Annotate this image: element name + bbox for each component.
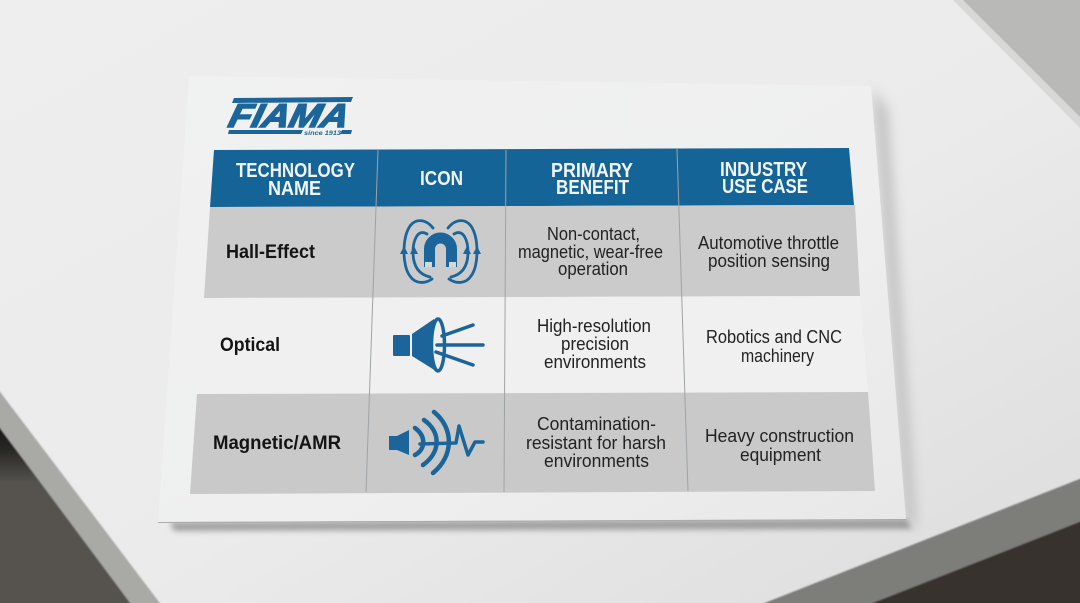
icon: light source with beams [393, 318, 483, 372]
benefit: environments [544, 450, 649, 471]
logo: FIAMA: FIAMA [225, 98, 353, 135]
desk corner, lower left [0, 364, 181, 603]
desk corner, lower right [696, 467, 1080, 603]
icon: horseshoe magnet with field lines [400, 221, 481, 282]
icon: speaker with waves and pulse [389, 412, 483, 473]
benefit: Non-contact, [547, 223, 640, 244]
benefit: operation [558, 258, 628, 279]
paper sheet [158, 76, 906, 522]
row: Hall-Effect [204, 205, 860, 298]
benefit: resistant for harsh [526, 432, 666, 453]
header: primary benefit [551, 160, 634, 199]
background wall, upper right [953, 0, 1080, 128]
header row [210, 148, 854, 207]
benefit: precision [561, 333, 629, 354]
header: primary benefit: BENEFIT [556, 177, 629, 199]
header: primary benefit: PRIMARY [551, 160, 634, 182]
use case: Robotics and CNC [706, 326, 842, 347]
table [190, 148, 875, 494]
use case [706, 326, 842, 366]
paper shadow: right side [872, 88, 916, 530]
header: industry use case: INDUSTRY [720, 159, 808, 181]
logo: FIAMA: since 1913 [304, 130, 341, 137]
use case: position sensing [708, 250, 830, 271]
header: technology name [236, 160, 356, 200]
header: technology name: TECHNOLOGY [236, 160, 356, 182]
header: industry use case: USE CASE [722, 176, 808, 198]
header: icon: ICON [420, 168, 463, 190]
benefit [537, 315, 651, 372]
name: Magnetic/AMR [213, 432, 341, 454]
benefit: environments [544, 351, 646, 372]
benefit: Contamination- [537, 413, 656, 434]
benefit [526, 413, 666, 471]
header: technology name: NAME [268, 178, 321, 200]
name: Optical [220, 334, 280, 356]
benefit: High-resolution [537, 315, 651, 336]
benefit [518, 223, 663, 279]
row: Magnetic/AMR [190, 392, 875, 494]
use case: Heavy construction [705, 425, 854, 446]
use case: equipment [740, 444, 821, 465]
row: Optical [197, 296, 868, 394]
use case [705, 425, 854, 465]
name: Hall-Effect [226, 241, 315, 263]
paper shadow: bottom [170, 519, 912, 531]
use case [698, 232, 839, 271]
header: industry use case [720, 159, 808, 198]
benefit: magnetic, wear-free [518, 241, 663, 262]
use case: machinery [741, 345, 815, 366]
use case: Automotive throttle [698, 232, 839, 253]
